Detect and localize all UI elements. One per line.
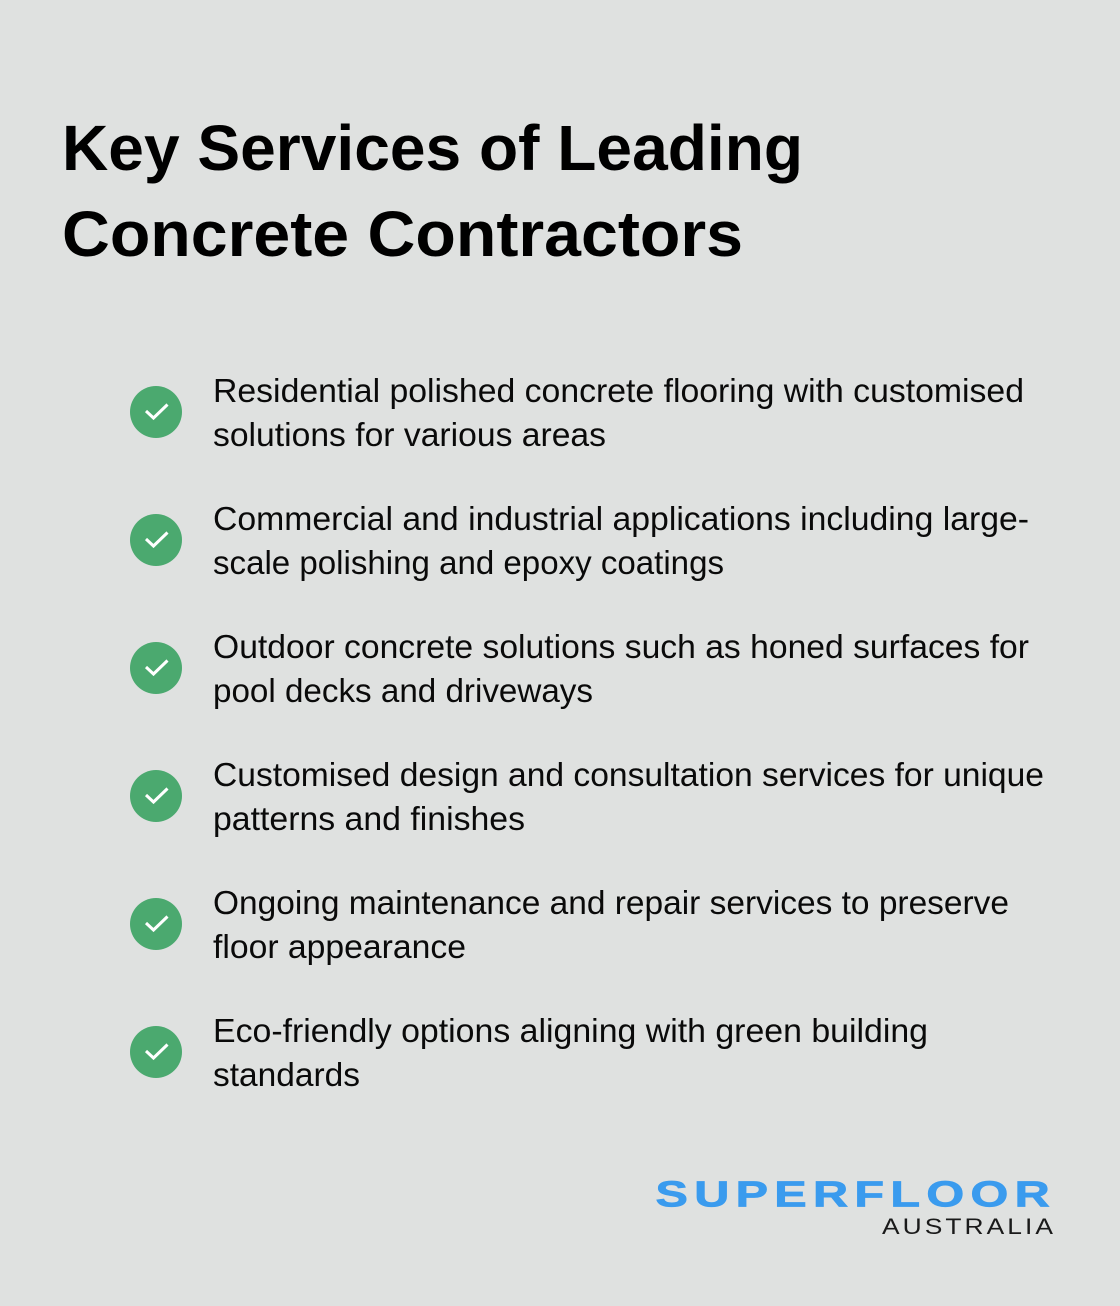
checklist xyxy=(130,372,1044,1093)
item text: solutions for various areas xyxy=(213,416,606,453)
icon: check xyxy=(130,770,182,822)
item text xyxy=(213,756,1044,837)
item text xyxy=(213,372,1024,453)
item text xyxy=(213,628,1029,709)
item text: scale polishing and epoxy coatings xyxy=(213,544,724,581)
item: eco-friendly options xyxy=(130,1012,928,1093)
item text: patterns and finishes xyxy=(213,800,525,837)
logo: Superfloor Australia xyxy=(656,1175,1054,1239)
item: maintenance and repair xyxy=(130,884,1009,965)
icon: check xyxy=(130,386,182,438)
item text: Ongoing maintenance and repair services to preserve xyxy=(213,884,1009,921)
icon: check xyxy=(130,642,182,694)
item text: Commercial and industrial applications including large- xyxy=(213,500,1029,537)
title: Key Services of Leading xyxy=(62,112,803,184)
item text xyxy=(213,884,1009,965)
title xyxy=(62,112,803,270)
item text: Customised design and consultation services for unique xyxy=(213,756,1044,793)
item text xyxy=(213,500,1029,581)
item text: pool decks and driveways xyxy=(213,672,593,709)
item text: Residential polished concrete flooring with customised xyxy=(213,372,1024,409)
item: customised design xyxy=(130,756,1044,837)
logo: Superfloor Australia: AUSTRALIA xyxy=(882,1215,1054,1239)
item text: Eco-friendly options aligning with green building xyxy=(213,1012,928,1049)
icon: check xyxy=(130,1026,182,1078)
item: residential flooring xyxy=(130,372,1024,453)
icon: check xyxy=(130,898,182,950)
logo: Superfloor Australia: SUPERFLOOR xyxy=(656,1175,1050,1215)
item text: Outdoor concrete solutions such as honed surfaces for xyxy=(213,628,1029,665)
title: Concrete Contractors xyxy=(62,198,743,270)
item: outdoor solutions xyxy=(130,628,1029,709)
item: commercial and industrial xyxy=(130,500,1029,581)
icon: check xyxy=(130,514,182,566)
item text: floor appearance xyxy=(213,928,466,965)
item text xyxy=(213,1012,928,1093)
item text: standards xyxy=(213,1056,360,1093)
